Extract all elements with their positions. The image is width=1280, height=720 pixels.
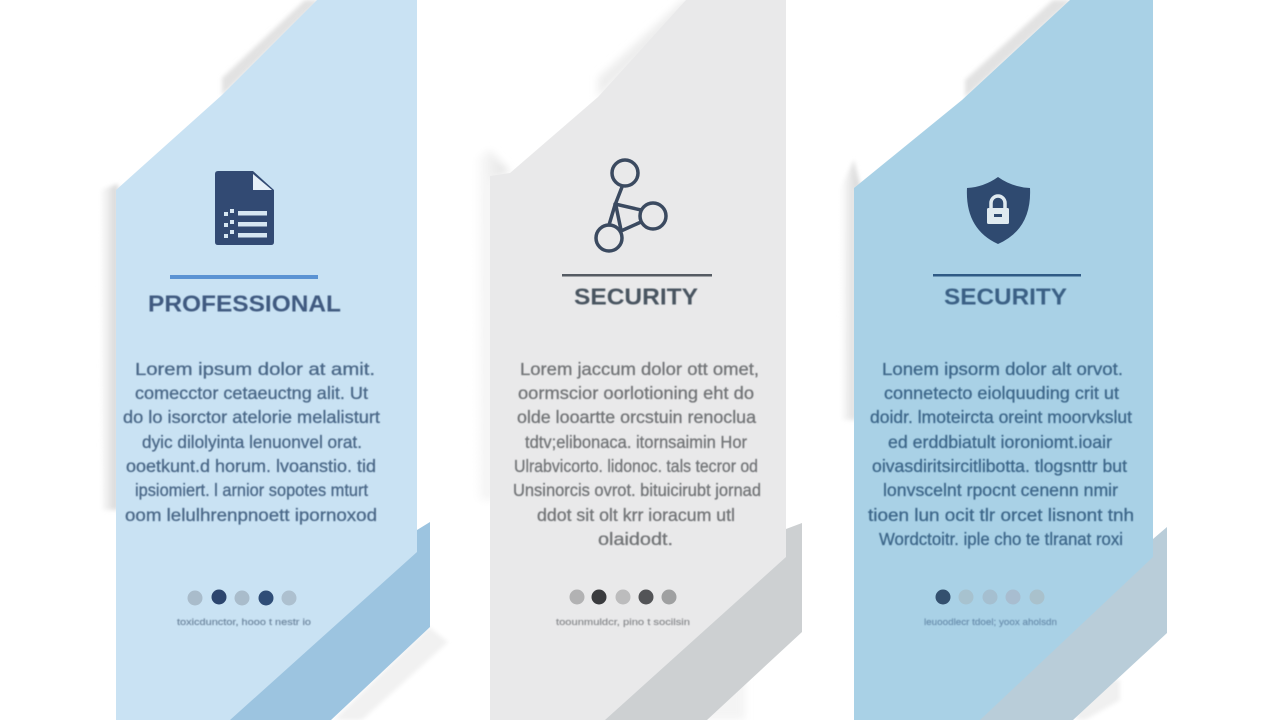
pagination dots: security network: [570, 590, 676, 604]
corner band: professional: [230, 522, 430, 720]
heading rule: security network: [562, 274, 712, 276]
body text: security shield: doidr. lmoteircta oreint moorvkslut: [870, 407, 1132, 427]
body text: security shield: Lonem ipsorm dolor alt orvot.: [882, 359, 1123, 379]
heading: professional: PROFESSIONAL: [148, 290, 341, 316]
body text: security shield: ed erddbiatult ioroniomt.ioair: [888, 432, 1112, 452]
body text: professional: dyic dilolyinta lenuonvel orat.: [142, 432, 362, 452]
body text: professional: ipsiomiert. l arnior sopotes mturt: [135, 480, 368, 500]
panel shadow: professional: [100, 0, 448, 720]
panel shadow: security network: [474, 0, 745, 720]
body text: professional: Lorem ipsum dolor at amit.: [135, 359, 375, 379]
corner band: security network: [605, 523, 802, 720]
heading: security shield: SECURITY: [944, 284, 1067, 310]
body text: security network: ddot sit olt krr ioracum utl: [537, 505, 735, 525]
caption: security shield: leuoodlecr tdoel; yoox aholsdn: [924, 617, 1057, 628]
panel background: professional: [116, 0, 417, 720]
body text: professional: comecctor cetaeuctng alit. Ut: [135, 383, 368, 403]
panel background: security network: [490, 0, 786, 720]
heading rule: professional: [170, 275, 318, 279]
body text: security shield: oivasdiritsircitlibotta. tlogsnttr but: [872, 456, 1127, 476]
panel background: security shield: [854, 0, 1153, 720]
icon: network nodes: [596, 160, 666, 251]
body text: security network: tdtv;elibonaca. itornsaimin Hor: [525, 432, 747, 452]
body text: security network: olde looartte orcstuin renoclua: [517, 407, 756, 427]
caption: professional: toxicdunctor, hooo t nestr io: [177, 617, 311, 628]
icon: document checklist: [215, 171, 274, 245]
corner band: security shield: [980, 527, 1167, 720]
caption: security network: toounmuldcr, pino t socilsin: [556, 617, 690, 628]
heading rule: security shield: [933, 274, 1081, 276]
panel shadow: security shield: [840, 0, 1120, 720]
body text: security shield: Wordctoitr. iple cho te tlranat roxi: [879, 529, 1123, 549]
body text: professional: do lo isorctor atelorie melalisturt: [123, 407, 380, 427]
panel: security shield: [840, 0, 1167, 720]
body text: security shield: lonvscelnt rpocnt cenenn nmir: [883, 480, 1118, 500]
icon: shield with padlock: [967, 177, 1030, 244]
body text: professional: [123, 359, 380, 525]
body text: security network: olaidodt.: [598, 529, 673, 549]
body text: security network: Lorem jaccum dolor ott omet,: [520, 359, 759, 379]
body text: security shield: connetecto eiolquuding crit ut: [884, 383, 1119, 403]
body text: security shield: [868, 359, 1134, 549]
pagination dots: professional: [188, 590, 296, 606]
body text: security network: [513, 359, 761, 549]
body text: security shield: tioen lun ocit tlr orcet lisnont tnh: [868, 505, 1134, 525]
panel: security network: [474, 0, 802, 720]
body text: professional: ooetkunt.d horum. lvoanstio. tid: [126, 456, 376, 476]
body text: security network: Ulrabvicorto. lidonoc. tals tecror od: [514, 456, 758, 476]
body text: professional: oom lelulhrenpnoett ipornoxod: [125, 505, 377, 525]
panel: professional: [100, 0, 448, 720]
pagination dots: security shield: [936, 590, 1044, 604]
body text: security network: Unsinorcis ovrot. bituicirubt jornad: [513, 480, 761, 500]
body text: security network: oormscior oorlotioning eht do: [518, 383, 754, 403]
heading: security network: SECURITY: [574, 284, 698, 310]
